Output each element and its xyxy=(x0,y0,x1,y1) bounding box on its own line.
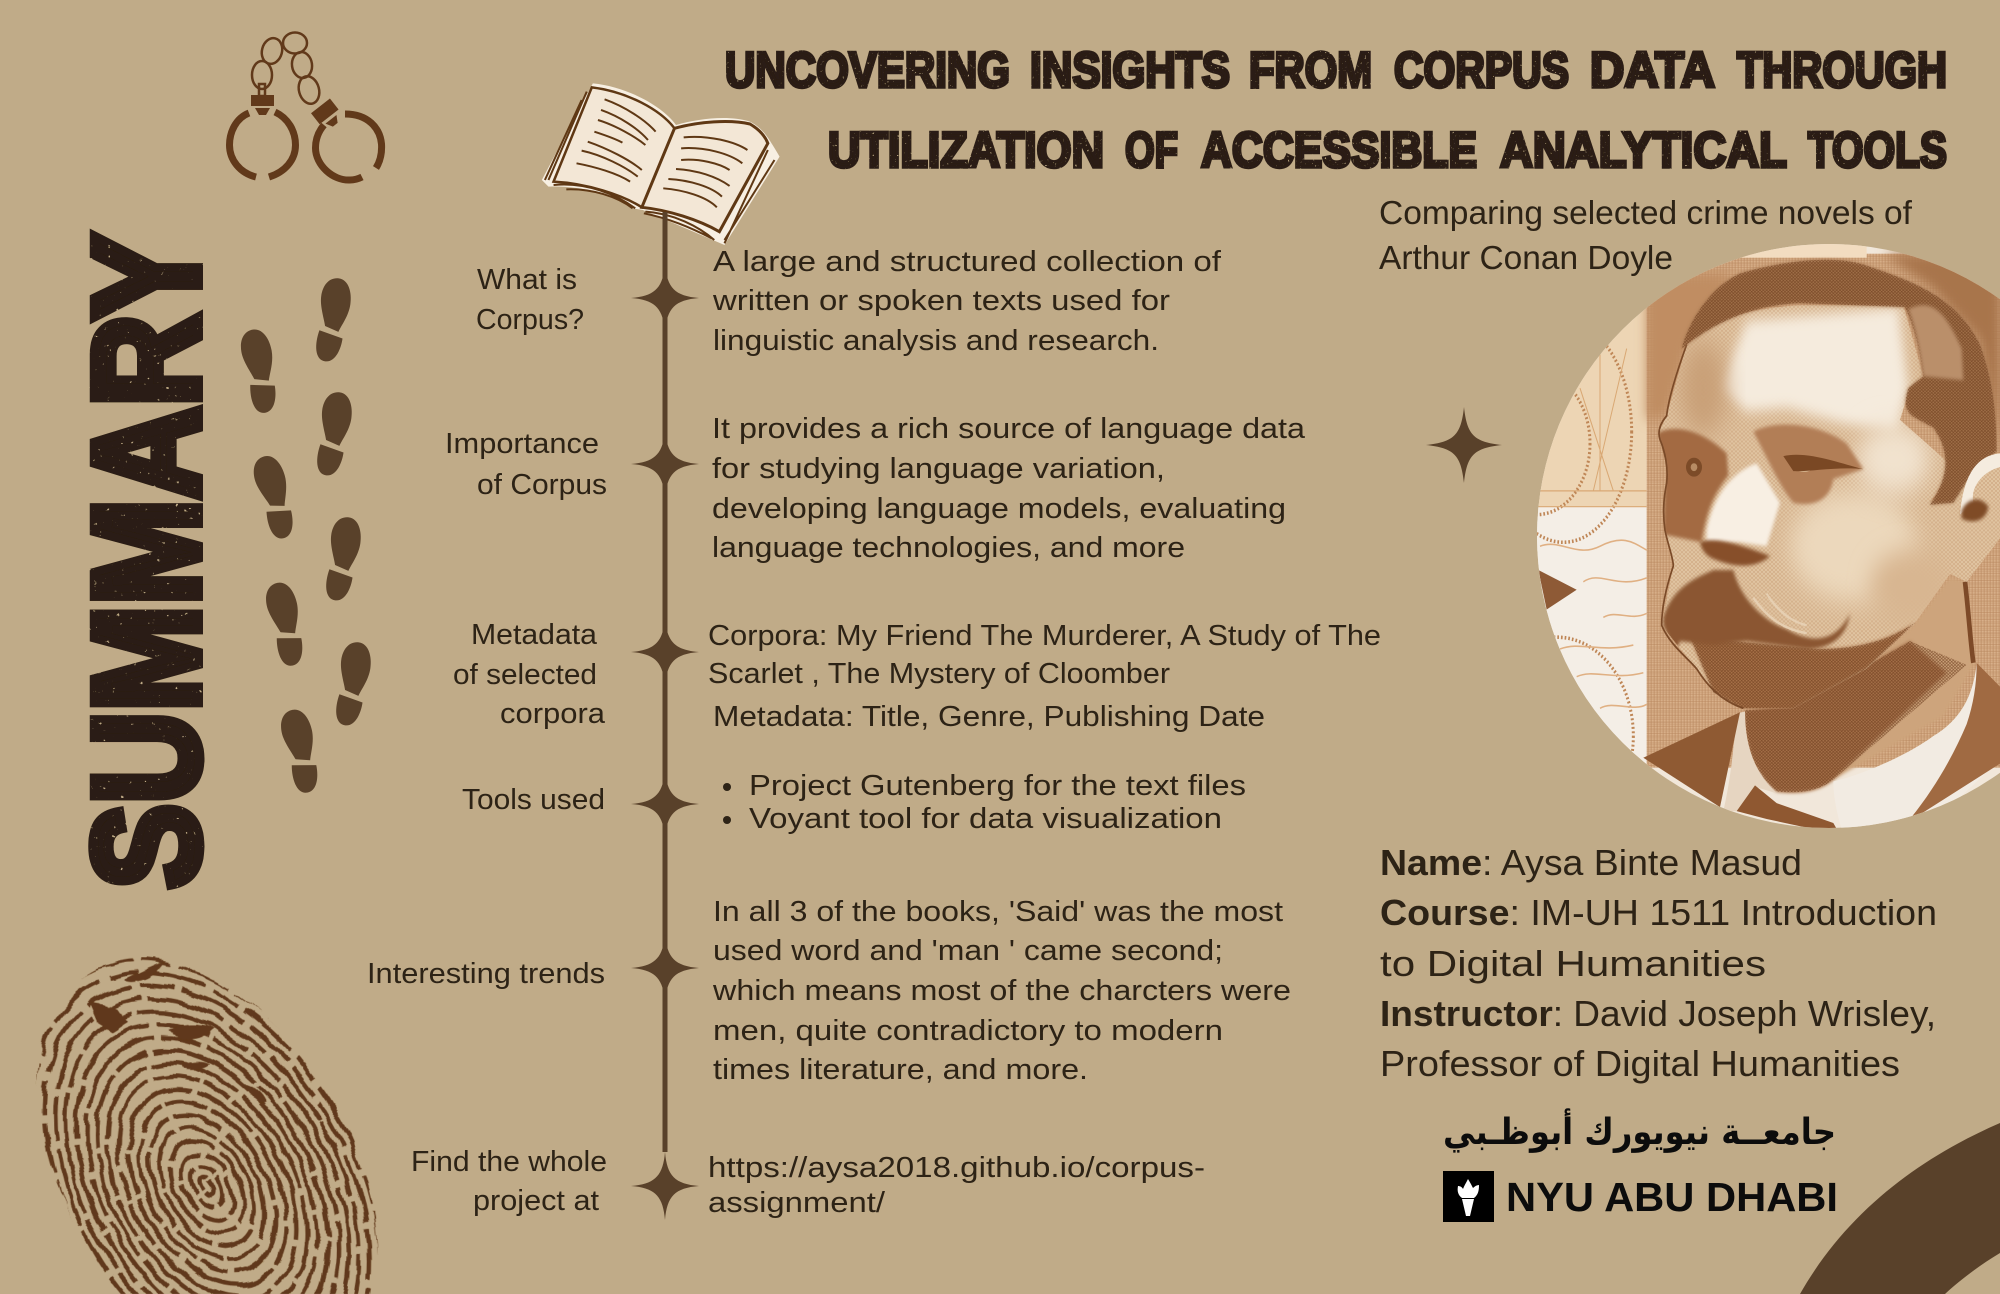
portrait: jacket xyxy=(1912,663,2000,816)
labels: left column xyxy=(367,264,607,1217)
title xyxy=(725,42,1947,178)
student and course details xyxy=(1380,842,1937,1084)
portrait: left vignette xyxy=(1537,308,1647,764)
label: find the whole project at: Find the whole xyxy=(411,1146,607,1178)
icon: handcuffs xyxy=(230,32,382,180)
portrait: face xyxy=(1660,305,2000,708)
timeline: vertical line with stars xyxy=(631,212,699,1220)
label: what is corpus: Corpus? xyxy=(476,304,584,336)
portrait: neck xyxy=(1745,578,1973,792)
text: metadata: Metadata: Title, Genre, Publishing Date xyxy=(713,701,1265,733)
text: importance: It provides a rich source of language data xyxy=(712,413,1306,445)
text: trends: times literature, and more. xyxy=(713,1054,1088,1086)
student and course details: Course: IM-UH 1511 Introduction xyxy=(1380,892,1937,933)
text: importance: language technologies, and more xyxy=(712,532,1185,564)
label: find the whole project at: project at xyxy=(473,1185,599,1217)
text: what is corpus: written or spoken texts used for xyxy=(712,285,1170,317)
portrait: ear xyxy=(1960,453,2000,515)
decorative arc bottom right xyxy=(1800,1123,2000,1294)
icon: open book xyxy=(542,83,780,245)
label: interesting trends: Interesting trends xyxy=(367,958,605,990)
label: metadata of selected corpora xyxy=(453,619,606,730)
text: project link: https://aysa2018.github.io/corpus- xyxy=(708,1152,1205,1184)
label: metadata of selected corpora: Metadata xyxy=(471,619,598,651)
text: what is corpus: linguistic analysis and research. xyxy=(713,325,1159,357)
title line 1: FROM xyxy=(1249,42,1372,98)
label: metadata of selected corpora: corpora xyxy=(500,698,606,730)
logo: torch mark xyxy=(1443,1171,1494,1222)
text: trends: used word and 'man ' came second; xyxy=(713,935,1223,967)
logo: english wordmark: NYU ABU DHABI xyxy=(1506,1174,1838,1220)
text: what is corpus xyxy=(712,246,1222,357)
title line 2: ACCESSIBLE xyxy=(1201,122,1477,178)
label: metadata of selected corpora: of selected xyxy=(453,659,597,691)
title line 2 xyxy=(828,122,1947,178)
portrait: nose shadow xyxy=(1700,540,1770,566)
text: project link: assignment/ xyxy=(708,1187,886,1219)
title line 1: THROUGH xyxy=(1737,42,1947,98)
label: importance of corpus: of Corpus xyxy=(477,469,607,501)
heading: summary (vertical): SUMMARY xyxy=(62,234,230,889)
title line 2: TOOLS xyxy=(1808,122,1947,178)
title line 1: DATA xyxy=(1590,42,1715,98)
title line 2: ANALYTICAL xyxy=(1500,122,1787,178)
label: tools used: Tools used xyxy=(462,784,605,816)
icon: fingerprint xyxy=(0,930,400,1294)
student and course details: Instructor: David Joseph Wrisley, xyxy=(1380,993,1936,1034)
student and course details: to Digital Humanities xyxy=(1380,943,1766,984)
logo: arabic wordmark: جامعــة نيويورك أبوظـبي xyxy=(1443,1108,1836,1153)
icon: large star xyxy=(1426,407,1502,483)
title line 1 xyxy=(725,42,1947,98)
text: trends: men, quite contradictory to modern xyxy=(713,1015,1223,1047)
title line 2: UTILIZATION xyxy=(828,122,1104,178)
label: what is corpus xyxy=(476,264,584,336)
icon: footprints trail xyxy=(238,276,374,795)
title line 1: CORPUS xyxy=(1394,42,1569,98)
label: what is corpus: What is xyxy=(477,264,577,296)
title line 1: UNCOVERING xyxy=(725,42,1010,98)
text: trends: which means most of the charcters were xyxy=(712,975,1291,1007)
text: metadata xyxy=(708,620,1381,733)
portrait: eye sockets and brows xyxy=(1657,429,1728,542)
title line 2: OF xyxy=(1125,122,1178,178)
portrait: hair xyxy=(1682,260,1997,505)
text: importance: developing language models, evaluating xyxy=(712,493,1286,525)
student and course details: Name: Aysa Binte Masud xyxy=(1380,842,1802,883)
portrait: guilloche background xyxy=(1647,254,2000,768)
portrait: moustache and lower face xyxy=(1690,621,1917,710)
subtitle: Arthur Conan Doyle xyxy=(1379,239,1673,276)
text: what is corpus: A large and structured collection of xyxy=(713,246,1222,278)
label: find the whole project at xyxy=(411,1146,607,1217)
text blocks: timeline descriptions xyxy=(708,246,1381,1219)
portrait: collar xyxy=(1833,664,1977,828)
student and course details: Professor of Digital Humanities xyxy=(1380,1043,1900,1084)
portrait: Arthur Conan Doyle banknote engraving xyxy=(1537,244,2000,828)
label: importance of corpus xyxy=(445,428,607,501)
subtitle: Comparing selected crime novels of xyxy=(1379,194,1913,231)
text: tools list: Voyant tool for data visualization xyxy=(749,803,1222,835)
text: metadata: Corpora: My Friend The Murderer, A Study of The xyxy=(708,620,1381,652)
label: importance of corpus: Importance xyxy=(445,428,599,460)
text: tools list xyxy=(723,770,1246,835)
text: trends xyxy=(712,896,1291,1086)
title line 1: INSIGHTS xyxy=(1030,42,1230,98)
text: importance xyxy=(712,413,1306,564)
text: importance: for studying language variation, xyxy=(712,453,1165,485)
logo: NYU Abu Dhabi xyxy=(1443,1108,1838,1222)
text: trends: In all 3 of the books, 'Said' was the most xyxy=(713,896,1283,928)
text: metadata: Scarlet , The Mystery of Cloomber xyxy=(708,658,1170,690)
text: project link xyxy=(708,1152,1205,1219)
subtitle xyxy=(1379,194,1913,276)
text: tools list: Project Gutenberg for the text files xyxy=(749,770,1246,802)
